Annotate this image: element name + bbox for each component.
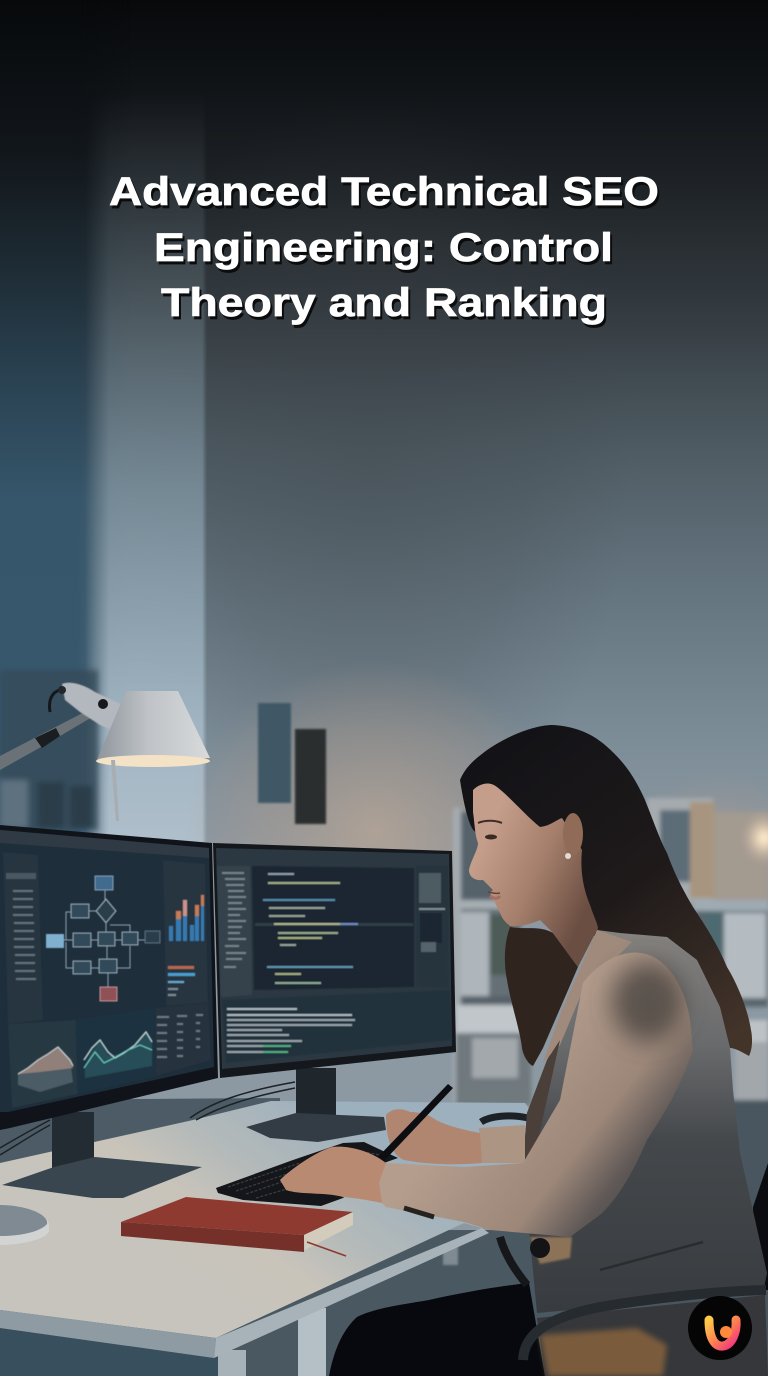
chair frame and trousers <box>329 1116 768 1376</box>
lamp shade <box>97 691 210 760</box>
file tree panel <box>217 866 252 997</box>
jacket body <box>523 930 767 1313</box>
terminal panel <box>222 990 452 1063</box>
code editor screen <box>216 848 452 1069</box>
near sleeve <box>378 952 693 1237</box>
wall area behind monitors <box>0 1098 280 1170</box>
hair lock below chin <box>505 927 578 1066</box>
hair back <box>460 725 752 1056</box>
shirt opening <box>523 1040 560 1163</box>
bottom right table <box>155 1003 211 1076</box>
ear and earring <box>563 813 583 859</box>
blurred window and shelves at far left <box>0 670 98 830</box>
flowchart <box>46 876 160 1001</box>
facial features <box>478 821 502 898</box>
bottom middle line chart <box>76 1008 156 1094</box>
sidebar <box>3 852 43 1024</box>
near hand <box>280 1147 386 1203</box>
title: Engineering: Control <box>154 226 613 270</box>
lamp rod <box>111 760 119 821</box>
lamp arm <box>0 683 125 770</box>
left monitor stand <box>2 1112 202 1198</box>
cuff buttons <box>404 1208 434 1217</box>
keyboard <box>216 1142 398 1206</box>
red notebook <box>121 1197 353 1256</box>
title <box>109 170 659 325</box>
pen <box>378 1084 453 1161</box>
bottom left area chart <box>8 1020 78 1108</box>
title: Theory and Ranking <box>161 281 607 325</box>
wall art frames <box>258 703 326 824</box>
chair arm <box>523 1290 766 1360</box>
right info panel with bars <box>163 860 208 1006</box>
left monitor <box>0 825 218 1130</box>
space under the desk <box>0 1230 560 1376</box>
jacket lower tan patch with button <box>530 1237 572 1264</box>
jacket hem seat area <box>537 1295 768 1376</box>
right monitor stand <box>246 1068 386 1142</box>
background shelving at right <box>453 798 768 1376</box>
face and neck <box>469 783 598 967</box>
code panel <box>252 866 414 990</box>
title: Advanced Technical SEO <box>109 170 659 214</box>
shoulder shadow <box>612 962 684 1042</box>
far hand <box>386 1109 482 1164</box>
cables behind monitors <box>0 1082 295 1155</box>
silver lamp base <box>0 1205 49 1245</box>
desk <box>0 1101 545 1358</box>
lamp light <box>96 755 210 767</box>
far forearm sleeve <box>479 1125 525 1163</box>
desk lamp <box>0 683 210 821</box>
pocket line <box>600 1242 703 1270</box>
logo badge <box>688 1296 752 1360</box>
minimap and outline panel <box>416 866 449 988</box>
collar and lapel <box>543 930 632 1062</box>
tan lining below hem <box>540 1328 667 1376</box>
woman <box>280 725 768 1376</box>
dashboard screen <box>0 830 214 1112</box>
right monitor <box>213 843 456 1078</box>
